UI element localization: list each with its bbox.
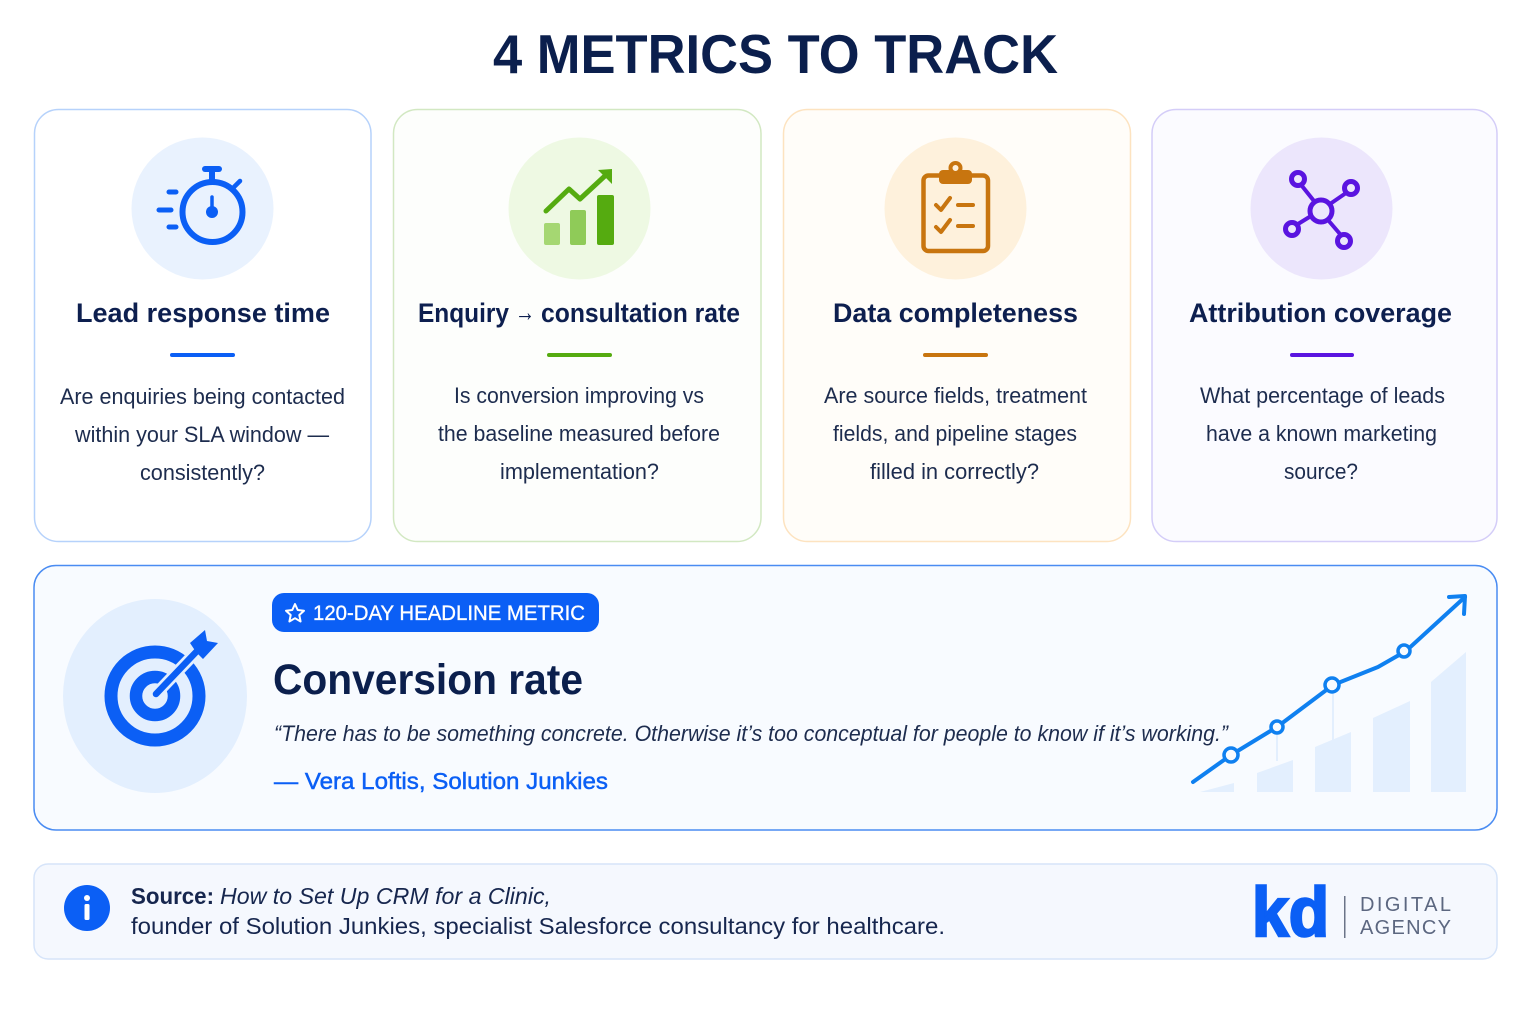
body text: have a known marketing: [1206, 421, 1437, 446]
panel: lead response time: [34, 110, 371, 542]
logo: kd: [1252, 873, 1329, 951]
icon: stopwatch: [132, 138, 274, 280]
badge: 120-DAY HEADLINE METRIC: [313, 602, 585, 625]
quote attribution: — Vera Loftis, Solution Junkies: [274, 768, 608, 794]
icon: target with arrow: [63, 599, 247, 793]
panel: source footer: [34, 864, 1497, 959]
title: 4 METRICS TO TRACK: [493, 23, 1058, 85]
heading: Lead response time: [76, 298, 330, 328]
metric heading: Conversion rate: [273, 656, 583, 704]
logo: [1252, 873, 1451, 951]
logo: DIGITAL: [1360, 894, 1451, 916]
body text: [824, 383, 1087, 484]
accent rule: [1290, 353, 1354, 357]
source text: founder of Solution Junkies, specialist Salesforce consultancy for healthcare.: [131, 913, 945, 939]
body text: fields, and pipeline stages: [833, 421, 1077, 446]
quote: “There has to be something concrete. Otherwise it’s too conceptual for people to know if it’s working.”: [274, 721, 1230, 746]
panel: attribution coverage: [1152, 110, 1497, 542]
body text: [438, 383, 720, 484]
panel: headline metric: [34, 566, 1497, 830]
icon: star: [286, 604, 304, 622]
body text: [1200, 383, 1445, 484]
logo: AGENCY: [1360, 917, 1451, 939]
source text: [131, 883, 945, 939]
accent rule: [170, 353, 235, 357]
accent rule: [923, 353, 988, 357]
chart: rising trend: [1193, 596, 1466, 792]
body text: What percentage of leads: [1200, 383, 1445, 408]
heading: Attribution coverage: [1189, 298, 1452, 328]
icon: rising bar chart: [508, 138, 650, 280]
body text: within your SLA window —: [74, 422, 329, 447]
icon: clipboard checklist: [884, 138, 1026, 280]
body text: Are enquiries being contacted: [60, 384, 345, 409]
panel: data completeness: [784, 110, 1130, 542]
heading: consultation rate: [541, 298, 740, 328]
source text: Source:: [131, 883, 214, 909]
body text: consistently?: [140, 460, 265, 485]
icon: info: [64, 885, 110, 931]
body text: source?: [1284, 459, 1358, 484]
heading: Data completeness: [833, 298, 1078, 328]
icon: network nodes: [1250, 138, 1392, 280]
heading: →: [515, 297, 535, 327]
source text: How to Set Up CRM for a Clinic,: [220, 883, 551, 909]
body text: filled in correctly?: [870, 459, 1039, 484]
heading: Enquiry: [418, 298, 509, 328]
body text: [60, 384, 345, 485]
body text: Are source fields, treatment: [824, 383, 1087, 408]
heading: [418, 297, 740, 328]
body text: implementation?: [500, 459, 659, 484]
badge: [272, 593, 599, 632]
panel: enquiry to consultation rate: [394, 110, 761, 542]
accent rule: [547, 353, 612, 357]
body text: Is conversion improving vs: [454, 383, 704, 408]
body text: the baseline measured before: [438, 421, 720, 446]
